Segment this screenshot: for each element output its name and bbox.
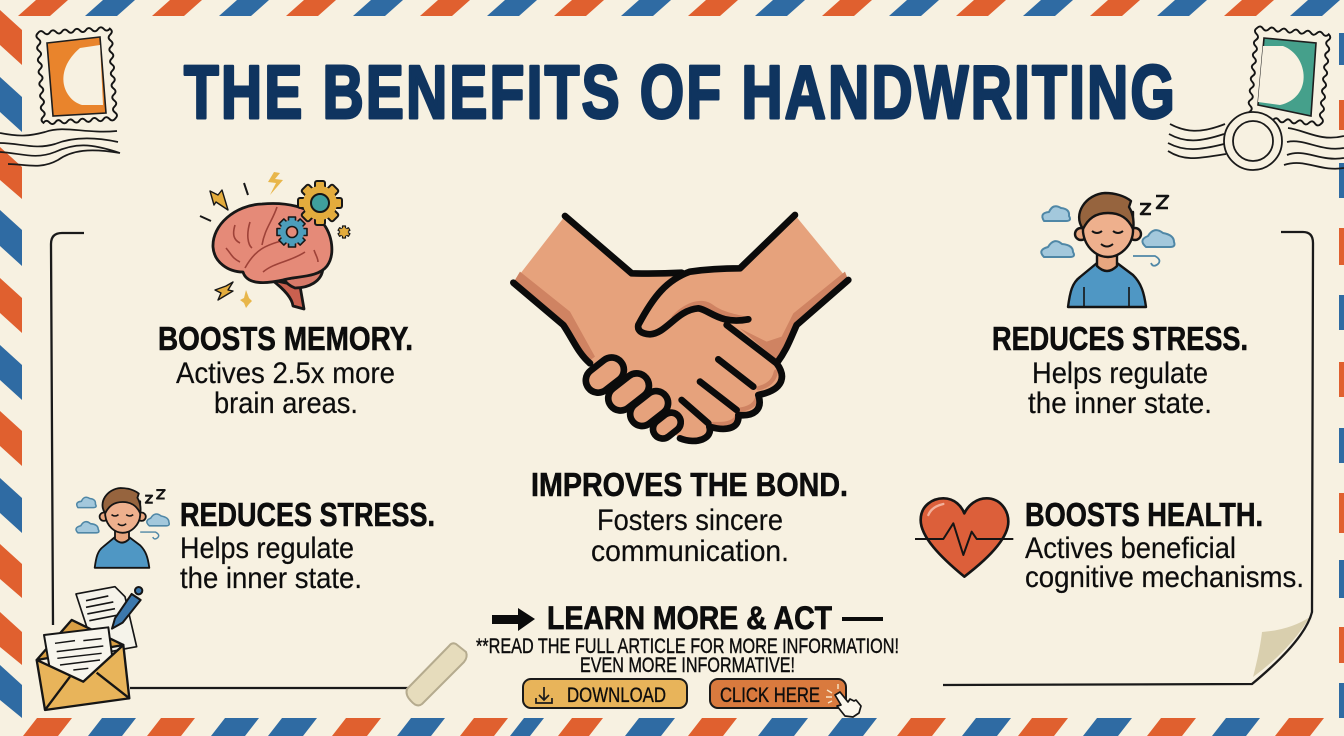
heading: REDUCES STRESS.	[992, 320, 1248, 357]
envelope back flap	[37, 620, 123, 660]
snooze letters	[1140, 196, 1168, 214]
arrow	[492, 608, 535, 631]
clouds	[1041, 206, 1174, 257]
benefit: boosts health	[1025, 496, 1304, 594]
face	[1083, 212, 1133, 257]
icon: envelope, letter and pen	[37, 587, 142, 710]
call to action	[476, 600, 899, 677]
heading: BOOSTS HEALTH.	[1025, 496, 1263, 533]
thumb shadow	[672, 301, 749, 323]
sparks	[200, 172, 283, 308]
description: Actives 2.5x more	[176, 357, 395, 390]
description: Helps regulate	[180, 532, 354, 565]
icon: brain with gears	[200, 172, 350, 309]
brain body	[213, 204, 332, 283]
heading: REDUCES STRESS.	[180, 496, 435, 533]
benefit: boosts memory	[158, 320, 413, 420]
neck	[1097, 250, 1117, 271]
hair	[1079, 193, 1134, 229]
click burst	[826, 684, 838, 703]
ears	[1075, 228, 1087, 240]
outlines	[513, 215, 848, 442]
left airmail border	[0, 10, 22, 718]
left postmark waves	[0, 129, 120, 166]
wrist shading	[513, 272, 848, 362]
benefit: boosts memory: brain areas.	[214, 387, 358, 420]
wind swirl	[1133, 256, 1159, 266]
closed eyes and smile	[1092, 231, 1123, 246]
benefit: reduces stress (left): the inner state.	[180, 562, 362, 595]
dash	[842, 617, 883, 621]
call to action: EVEN MORE INFORMATIVE!	[580, 654, 795, 677]
description: Fosters sincere	[597, 504, 783, 537]
benefit: boosts health: cognitive mechanisms.	[1025, 561, 1304, 594]
benefit: reduces stress (right)	[992, 320, 1248, 420]
envelope front	[37, 645, 129, 710]
cta text: **READ THE FULL ARTICLE FOR MORE INFORMATION!	[476, 635, 899, 658]
button: click here	[710, 679, 861, 717]
top airmail border	[18, 0, 1340, 16]
letter in envelope	[44, 627, 113, 682]
brain folds	[226, 207, 318, 272]
description: Helps regulate	[1032, 357, 1208, 390]
benefit: reduces stress (right): the inner state.	[1028, 387, 1212, 420]
heading: IMPROVES THE BOND.	[531, 466, 848, 503]
small blue gear	[277, 217, 307, 247]
icon: pointer hand	[835, 692, 861, 717]
button: download: DOWNLOAD	[567, 684, 666, 707]
hands fill	[513, 215, 848, 441]
benefit: reduces stress (left)	[180, 496, 435, 595]
benefit: improves the bond	[531, 466, 848, 568]
cta heading: LEARN MORE & ACT	[547, 600, 832, 636]
icon: download	[536, 687, 552, 703]
heading: BOOSTS MEMORY.	[158, 320, 413, 357]
right airmail border	[1339, 33, 1344, 718]
button: download	[523, 679, 687, 708]
bottom airmail border	[23, 718, 1324, 736]
thumb fill	[638, 268, 748, 334]
tape strip	[406, 643, 467, 705]
button: click here: CLICK HERE	[720, 684, 820, 707]
tiny gear	[338, 226, 350, 238]
panel frame: right bracket with curled corner	[943, 232, 1313, 685]
shirt	[1068, 263, 1146, 307]
left stamp	[36, 27, 117, 125]
right stamp	[1247, 26, 1331, 126]
right postmark	[1168, 112, 1344, 170]
icon: person resting (right)	[1041, 193, 1174, 307]
back paper	[76, 587, 137, 652]
benefit: improves the bond: communication.	[591, 535, 789, 568]
panel frame: left bracket	[51, 233, 410, 688]
sleeve lines	[1084, 287, 1129, 307]
description: Actives beneficial	[1025, 532, 1236, 565]
icon: handshake	[513, 215, 848, 442]
cerebellum and stem	[272, 268, 323, 309]
finger tip shading	[713, 372, 776, 424]
pen	[112, 594, 141, 629]
icon: heart with pulse	[915, 498, 1013, 577]
icon: person resting (left)	[76, 488, 169, 568]
large gold gear	[298, 181, 342, 225]
